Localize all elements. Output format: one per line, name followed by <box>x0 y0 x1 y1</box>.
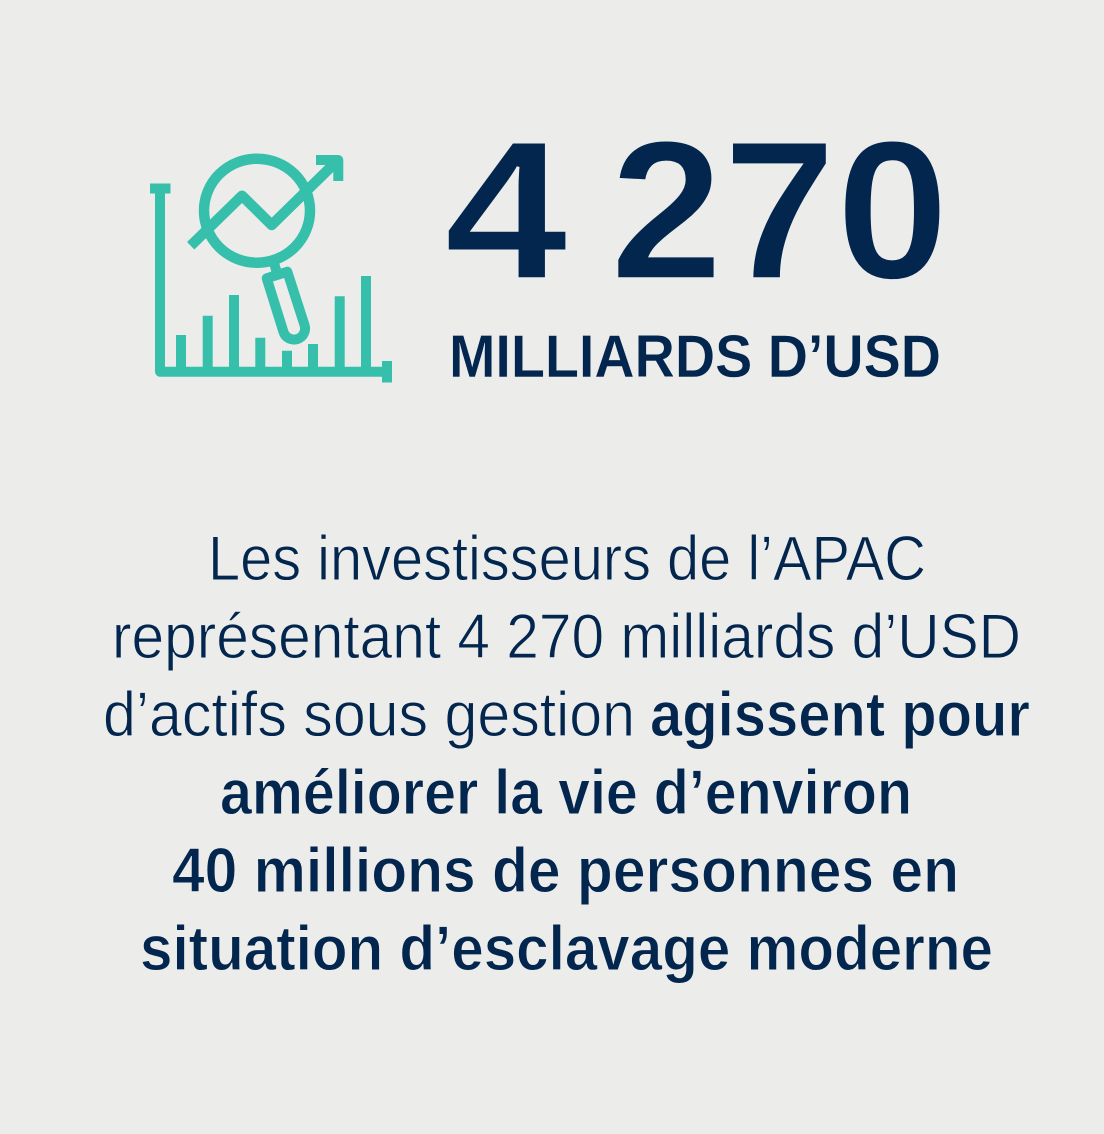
line 4: améliorer la vie d’environ <box>220 758 912 828</box>
line 5: 40 millions de personnes en <box>172 836 959 906</box>
line 3 regular: d’actifs sous gestion <box>103 680 635 750</box>
unit label: MILLIARDS D’USD <box>449 323 941 390</box>
axis end cap <box>382 361 392 382</box>
trend line <box>191 160 338 246</box>
digit 4: 4 <box>444 100 568 320</box>
digits 270: 270 <box>610 100 949 320</box>
trend arrow head <box>316 160 338 181</box>
line 6: situation d’esclavage moderne <box>140 914 993 984</box>
line 3 bold: agissent pour <box>650 680 1030 750</box>
line 1: Les investisseurs de l’APAC <box>208 524 926 594</box>
big number <box>444 100 949 320</box>
line 2: représentant 4 270 milliards d’USD <box>112 602 1021 672</box>
icon: chart with magnifying glass <box>150 159 392 382</box>
magnifier handle <box>267 272 305 340</box>
magnifier lens <box>204 159 310 263</box>
chart bars <box>181 276 366 372</box>
chart axes <box>150 188 387 372</box>
magnifier neck <box>274 263 277 272</box>
body text <box>103 524 1030 984</box>
